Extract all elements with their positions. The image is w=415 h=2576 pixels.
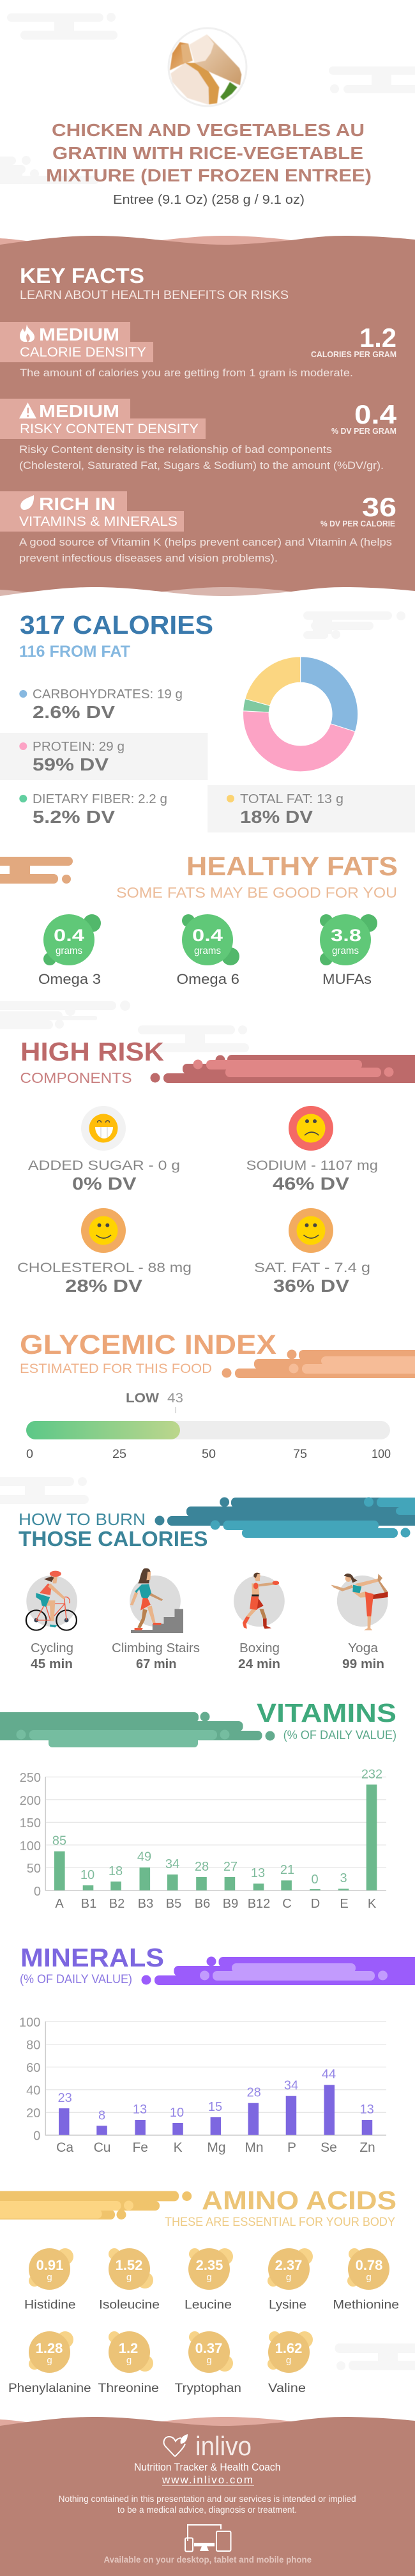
bar chart: vitamins: B1 (81, 1897, 96, 1911)
item: added sugar: ADDED SUGAR - 0 g (28, 1158, 180, 1173)
amino: leucine: Leucine (185, 2299, 232, 2312)
availability note: Available on your desktop, tablet and mobile phone (103, 2554, 312, 2564)
bar chart: vitamins: 250 (20, 1771, 41, 1785)
amino: tryptophan (175, 2331, 241, 2395)
bar chart: minerals: 28 (246, 2086, 261, 2100)
vitamins heading: VITAMINS (257, 1698, 396, 1728)
macro: carbohydrates: 2.6% DV (33, 702, 115, 722)
background clouds: high risk (0, 1000, 249, 1052)
amino: phenylalanine: g (47, 2355, 52, 2366)
icon: grinning face (81, 1106, 126, 1151)
bar chart: vitamins: 200 (20, 1794, 41, 1808)
amino: phenylalanine: Phenylalanine (8, 2382, 91, 2395)
icon: flame (20, 325, 34, 342)
icon: sad face (289, 1106, 333, 1151)
fact: risky content density: % DV PER GRAM (331, 426, 396, 436)
bar chart: minerals: 15 (208, 2100, 222, 2114)
bar chart: vitamins: D (311, 1897, 320, 1911)
bar chart: minerals: 13 (359, 2103, 374, 2117)
bar chart: vitamins: 0 (34, 1885, 41, 1899)
activity: boxing: 24 min (238, 1657, 280, 1671)
amino: threonine: Threonine (98, 2382, 159, 2395)
bar chart: vitamins: C (282, 1897, 292, 1911)
fact: risky content density: RISKY CONTENT DENSITY (20, 422, 199, 436)
activity: cycling: 45 min (31, 1657, 73, 1671)
panel: high risk components (17, 1037, 415, 1296)
bar chart: minerals: Mn (245, 2140, 264, 2155)
amino acids subheading: THESE ARE ESSENTIAL FOR YOUR BODY (165, 2216, 395, 2229)
activity: cycling: Cycling (31, 1641, 73, 1655)
item: sodium (246, 1106, 378, 1193)
badge: omega 6: 0.4 (192, 926, 223, 945)
vitamins subheading: (% OF DAILY VALUE) (283, 1729, 396, 1742)
amino: tryptophan: Tryptophan (175, 2382, 241, 2395)
icon: devices (185, 2525, 231, 2552)
panel: how to burn those calories (19, 1498, 415, 1671)
bar chart: vitamins: B5 (166, 1897, 181, 1911)
bar chart: vitamins: A (55, 1897, 64, 1911)
amino: tryptophan: g (206, 2355, 212, 2366)
logo: inlivo: inlivo (195, 2431, 252, 2461)
item: sodium: SODIUM - 1107 mg (246, 1158, 378, 1173)
healthy fats subheading: SOME FATS MAY BE GOOD FOR YOU (116, 884, 397, 901)
macro: total fat: 18% DV (240, 807, 313, 827)
item: added sugar: 0% DV (72, 1174, 137, 1193)
minerals subheading: (% OF DAILY VALUE) (20, 1973, 132, 1986)
amino acids heading: AMINO ACIDS (202, 2186, 396, 2215)
amino: lysine (268, 2248, 313, 2312)
bar chart: minerals (19, 2016, 386, 2155)
badge: omega 3 (38, 914, 101, 987)
bar chart: vitamins: B9 (223, 1897, 238, 1911)
value label: 43 (167, 1391, 183, 1406)
fact: risky content density: MEDIUM (39, 401, 119, 421)
icon: woman on stairs (130, 1568, 183, 1633)
amino: histidine: Histidine (24, 2299, 76, 2312)
bar chart: vitamins: B3 (138, 1897, 153, 1911)
macro: protein: 59% DV (33, 755, 109, 774)
gauge scale: 75 (293, 1448, 307, 1461)
amino: methionine (333, 2248, 399, 2312)
item: cholesterol: 28% DV (65, 1276, 142, 1296)
fact: calorie density: CALORIE DENSITY (20, 345, 146, 360)
panel: minerals (19, 1943, 415, 2155)
fact: rich in vitamins and minerals: RICH IN (39, 494, 116, 514)
logo: inlivo (164, 2431, 252, 2461)
bar chart: minerals: 13 (133, 2103, 147, 2117)
bar chart: minerals: Se (321, 2140, 337, 2155)
decoration: yellow bars (0, 2191, 192, 2220)
macro: protein: PROTEIN: 29 g (33, 740, 124, 754)
decoration: orange bars (0, 857, 73, 884)
fact: calorie density: CALORIES PER GRAM (311, 349, 396, 359)
bar chart: minerals: Mg (207, 2140, 226, 2155)
item: saturated fat (254, 1208, 370, 1296)
background cloud: amino acids (335, 2343, 415, 2370)
amino: methionine: g (366, 2272, 372, 2283)
amino: isoleucine: Isoleucine (99, 2299, 160, 2312)
gauge scale (26, 1448, 391, 1461)
panel: calories and macronutrients (0, 610, 415, 832)
icon: smiling face (289, 1208, 333, 1253)
bar chart: minerals: 60 (26, 2061, 40, 2075)
calories heading: 317 CALORIES (20, 610, 213, 640)
activity: climbing stairs: 67 min (136, 1657, 176, 1671)
fact: rich in vitamins and minerals (0, 491, 396, 564)
amino: isoleucine: g (126, 2272, 132, 2283)
gauge scale: 100 (372, 1448, 391, 1461)
website link: www.inlivo.com (162, 2474, 253, 2486)
item: saturated fat: 36% DV (273, 1276, 349, 1296)
item: added sugar (28, 1106, 180, 1193)
icon: cyclist (26, 1571, 77, 1630)
bar chart: minerals: K (174, 2140, 183, 2155)
panel: amino acids (0, 2186, 399, 2395)
minerals heading: MINERALS (20, 1943, 164, 1972)
bar chart: vitamins: 34 (165, 1857, 179, 1871)
badge: MUFAs: MUFAs (322, 971, 372, 987)
amino: isoleucine (99, 2248, 160, 2312)
activity: climbing stairs: Climbing Stairs (112, 1641, 200, 1655)
bar chart: vitamins: 49 (137, 1850, 151, 1864)
glycemic index subheading: ESTIMATED FOR THIS FOOD (20, 1361, 212, 1376)
glycemic index heading: GLYCEMIC INDEX (20, 1330, 276, 1360)
bar chart: vitamins: 21 (280, 1863, 294, 1877)
amino: methionine: 0.78 (356, 2257, 382, 2273)
disclaimer: Nothing contained in this presentation and our services is intended or implied (59, 2494, 356, 2504)
fact: rich in vitamins and minerals: 36 (362, 492, 396, 522)
fact: rich in vitamins and minerals: A good source of Vitamin K (helps prevent cancer) and Vitamin A (helps (19, 536, 392, 548)
value label: LOW (126, 1391, 159, 1406)
amino: lysine: g (286, 2272, 291, 2283)
bar chart: vitamins: B6 (195, 1897, 210, 1911)
disclaimer (59, 2494, 356, 2515)
decoration: green bars (0, 1712, 275, 1747)
activity: yoga: Yoga (348, 1641, 379, 1655)
bar chart: minerals: 0 (33, 2129, 40, 2143)
amino: histidine: g (47, 2272, 52, 2283)
burn heading: line 1: HOW TO BURN (19, 1510, 146, 1529)
high risk heading: HIGH RISK (20, 1037, 164, 1066)
amino: threonine: 1.2 (119, 2340, 138, 2356)
macro: protein (19, 740, 124, 774)
amino: threonine (98, 2331, 159, 2395)
badge: MUFAs (320, 914, 377, 987)
amino: valine: 1.62 (275, 2340, 302, 2356)
bar chart: vitamins: 10 (80, 1868, 94, 1882)
activity: yoga: 99 min (342, 1657, 384, 1671)
panel: glycemic index (20, 1330, 415, 1461)
disclaimer: to be a medical advice, diagnosis or treatment. (117, 2504, 297, 2515)
panel: vitamins (0, 1698, 396, 1911)
bar chart: vitamins: 13 (251, 1866, 265, 1880)
calories from fat: 116 FROM FAT (19, 643, 130, 661)
bar chart: vitamins: 232 (361, 1767, 382, 1781)
item: cholesterol: CHOLESTEROL - 88 mg (17, 1261, 192, 1275)
panel: footer (0, 2417, 415, 2576)
title (46, 120, 372, 185)
bar chart: vitamins: 28 (195, 1860, 209, 1874)
amino: leucine: 2.35 (196, 2257, 223, 2273)
fact: calorie density: MEDIUM (39, 325, 119, 344)
gauge bar (26, 1421, 390, 1439)
amino: phenylalanine: 1.28 (36, 2340, 63, 2356)
item: sodium: 46% DV (273, 1174, 349, 1193)
fact: rich in vitamins and minerals: VITAMINS & MINERALS (19, 514, 177, 529)
badge: omega 3: grams (56, 946, 82, 956)
bar chart: minerals: 10 (170, 2106, 184, 2120)
icon: yoga pose (331, 1574, 388, 1630)
components subheading: COMPONENTS (20, 1070, 132, 1086)
amino: valine (268, 2331, 313, 2395)
fact: calorie density: The amount of calories you are getting from 1 gram is moderate. (20, 367, 353, 379)
fact: calorie density: 1.2 (359, 323, 396, 353)
activity: cycling (26, 1571, 77, 1671)
background cloud: burn (0, 1477, 89, 1504)
bar chart: minerals: 80 (26, 2038, 40, 2052)
macro: total fat: TOTAL FAT: 13 g (240, 792, 343, 806)
macro: total fat (227, 792, 343, 827)
amino: tryptophan: 0.37 (195, 2340, 222, 2356)
bar chart: vitamins: 3 (340, 1871, 347, 1885)
panel: key facts (0, 236, 415, 607)
gauge scale: 50 (202, 1448, 216, 1461)
bar chart: vitamins: 100 (20, 1839, 41, 1853)
decoration: purple bars (142, 1956, 415, 1985)
decoration: teal bars (155, 1498, 415, 1538)
icon: leaf (20, 495, 34, 510)
amino: valine: Valine (268, 2382, 306, 2395)
amino: histidine (24, 2248, 76, 2312)
fact: risky content density (0, 399, 397, 471)
key facts subheading: LEARN ABOUT HEALTH BENEFITS OR RISKS (20, 289, 289, 302)
background cloud: calories (303, 611, 405, 639)
bar chart: vitamins (20, 1767, 386, 1911)
bar chart: vitamins: 18 (109, 1864, 123, 1878)
background clouds: header (0, 13, 415, 184)
badge: omega 6 (176, 914, 239, 987)
amino: phenylalanine (8, 2331, 91, 2395)
badge: omega 6: Omega 6 (176, 971, 239, 987)
badge: omega 3: 0.4 (54, 926, 84, 945)
macro: carbohydrates: CARBOHYDRATES: 19 g (33, 687, 183, 702)
title: CHICKEN AND VEGETABLES AU (52, 120, 365, 140)
key facts heading: KEY FACTS (20, 264, 144, 288)
amino: histidine: 0.91 (36, 2257, 63, 2273)
icon: boxer (234, 1572, 285, 1629)
bar chart: minerals: 8 (98, 2108, 105, 2122)
fact: risky content density: Risky Content density is the relationship of bad components (19, 443, 332, 456)
decoration: red bars (151, 1055, 415, 1083)
gauge scale: 25 (112, 1448, 126, 1461)
value label (126, 1391, 183, 1406)
fact: risky content density: 0.4 (354, 399, 397, 429)
gauge scale: 0 (26, 1448, 33, 1461)
bar chart: minerals: 100 (19, 2016, 40, 2030)
amino: leucine (185, 2248, 233, 2312)
bar chart: minerals: Cu (94, 2140, 110, 2155)
bar chart: vitamins: 50 (27, 1862, 41, 1876)
bar chart: vitamins: 150 (20, 1816, 41, 1830)
amino: lysine: Lysine (269, 2299, 306, 2312)
amino: isoleucine: 1.52 (116, 2257, 142, 2273)
badge: omega 3: Omega 3 (38, 971, 101, 987)
badge: MUFAs: 3.8 (331, 926, 361, 945)
macro: carbohydrates (19, 687, 183, 722)
icon: warning triangle (19, 402, 36, 418)
serving size subtitle: Entree (9.1 Oz) (258 g / 9.1 oz) (113, 193, 305, 207)
activity: boxing (234, 1572, 285, 1671)
burn heading: line 2: THOSE CALORIES (19, 1527, 208, 1551)
title: GRATIN WITH RICE-VEGETABLE (52, 143, 363, 163)
bar chart: vitamins: B12 (248, 1897, 270, 1911)
macro row backgrounds (0, 733, 415, 832)
badge: MUFAs: grams (332, 946, 359, 956)
bar chart: minerals: 23 (57, 2091, 72, 2105)
title: MIXTURE (DIET FROZEN ENTREE) (46, 165, 372, 185)
activity: climbing stairs (112, 1568, 200, 1671)
bar chart: minerals: Zn (359, 2140, 375, 2155)
icon: smiling face (81, 1208, 126, 1253)
bar chart: vitamins: E (340, 1897, 349, 1911)
amino: leucine: g (206, 2272, 212, 2283)
bar chart: minerals: P (287, 2140, 296, 2155)
bar chart: minerals: 40 (26, 2084, 40, 2098)
bar chart: minerals: 44 (322, 2067, 336, 2082)
tagline: Nutrition Tracker & Health Coach (134, 2461, 281, 2473)
bar chart: minerals: Ca (56, 2140, 73, 2155)
fact: risky content density: (Cholesterol, Saturated Fat, Sugars & Sodium) to the amount (%DV/gr). (19, 459, 384, 471)
fact: calorie density (0, 322, 396, 379)
bar chart: vitamins: B2 (109, 1897, 124, 1911)
item: cholesterol (17, 1208, 192, 1296)
panel: healthy fats (0, 851, 398, 987)
bar chart: vitamins: K (368, 1897, 377, 1911)
donut chart (243, 657, 358, 772)
activity: yoga (331, 1574, 388, 1671)
amino: valine: g (286, 2355, 291, 2366)
amino: methionine: Methionine (333, 2299, 399, 2312)
fact: rich in vitamins and minerals: prevent infectious diseases and vision problems). (19, 552, 278, 564)
bar chart: minerals: 34 (284, 2079, 298, 2093)
badge: omega 6: grams (194, 946, 221, 956)
bar chart: vitamins: 0 (311, 1873, 319, 1887)
bar chart: minerals: Fe (132, 2140, 148, 2155)
macro: dietary fiber: 5.2% DV (33, 807, 115, 827)
healthy fats heading: HEALTHY FATS (186, 851, 398, 881)
bar chart: minerals: 20 (26, 2106, 40, 2120)
amino: threonine: g (126, 2355, 132, 2366)
item: saturated fat: SAT. FAT - 7.4 g (254, 1261, 370, 1275)
macro: dietary fiber: DIETARY FIBER: 2.2 g (33, 792, 167, 806)
amino: lysine: 2.37 (275, 2257, 302, 2273)
icon: chicken photo (169, 28, 246, 106)
bar chart: vitamins: 27 (223, 1860, 238, 1874)
activity: boxing: Boxing (239, 1641, 280, 1655)
bar chart: vitamins: 85 (52, 1834, 66, 1848)
decoration: orange bars (222, 1349, 415, 1378)
macro: dietary fiber (19, 792, 167, 827)
fact: rich in vitamins and minerals: % DV PER CALORIE (321, 519, 395, 528)
